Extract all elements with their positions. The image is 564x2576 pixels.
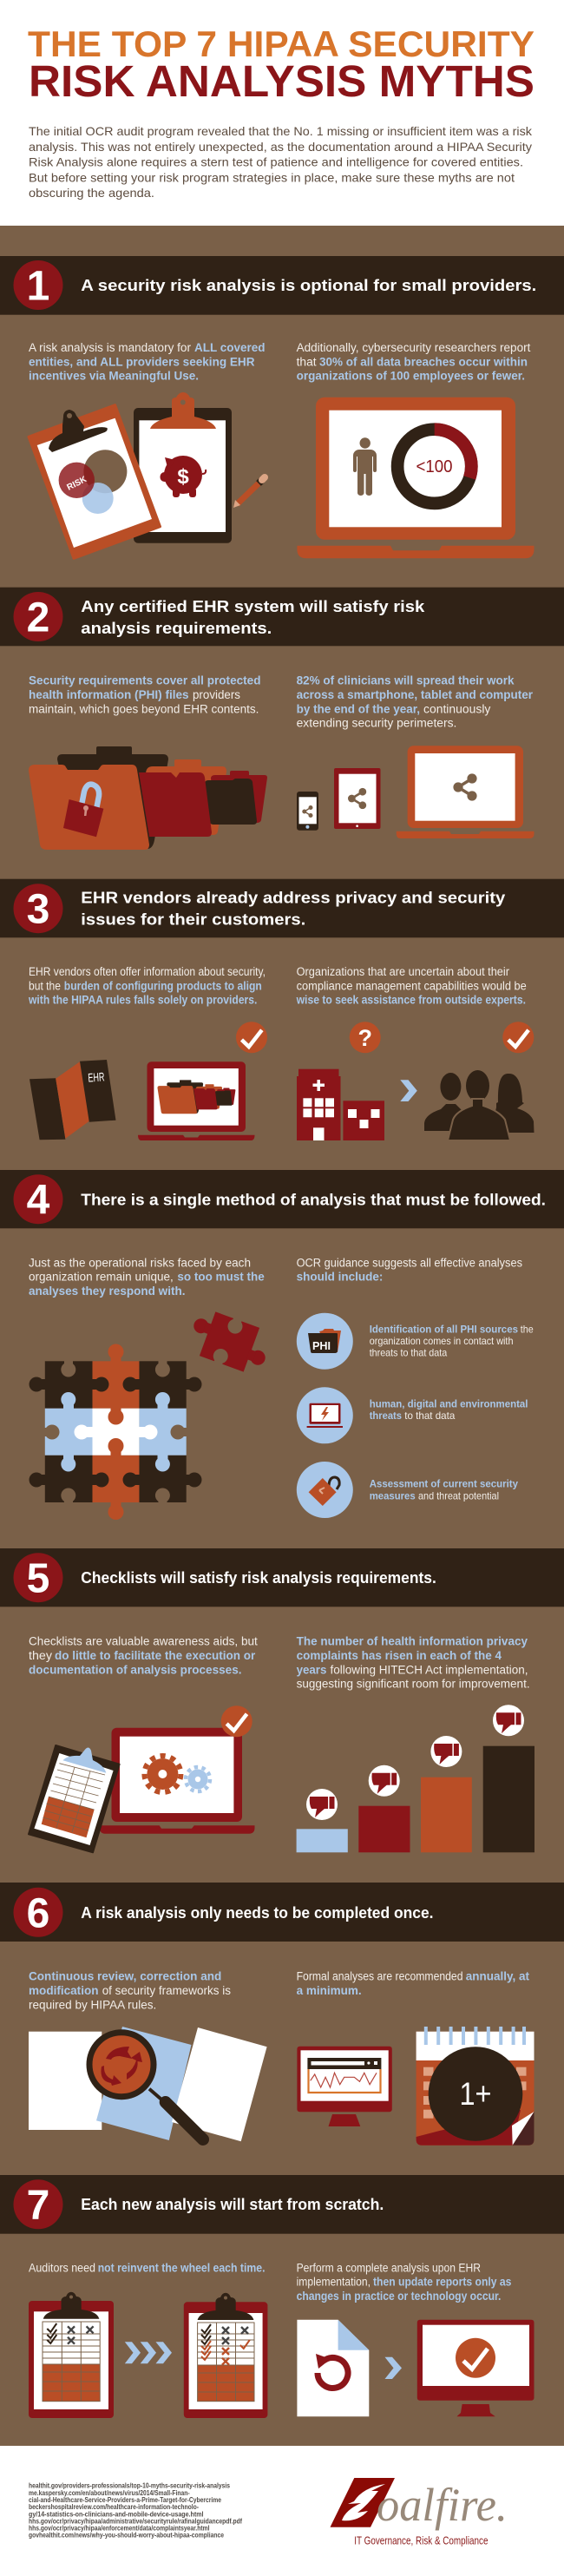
text: 82 percent of clinicians: extending security perimeters.: [297, 717, 456, 730]
intro paragraph: obscuring the agenda.: [29, 186, 154, 200]
icon: folders with padlock: [29, 746, 267, 850]
text: mandatory for all: [29, 341, 266, 382]
text: burden on providers: [28, 965, 266, 1007]
icon: documents with magnifying glass: [29, 2027, 267, 2141]
text: auditors: [29, 2261, 266, 2274]
text: annual analyses: [297, 1970, 529, 1997]
heading band 3: EHR vendors already address privacy and security: [81, 889, 506, 907]
icon: tilted checklist tablet: [29, 1745, 120, 1852]
heading band 5: Checklists will satisfy risk analysis requirements.: [81, 1568, 436, 1587]
text: 82 percent of clinicians: 82% of clinicians will spread their work: [297, 674, 515, 687]
text: unique analyses: [29, 1256, 265, 1298]
icon: EHR book: [30, 1060, 116, 1140]
panel: myth 4: [0, 1170, 564, 1520]
references list: [29, 2482, 242, 2540]
intro paragraph: Risk Analysis alone requires a stern test of patience and intelligence for covered entities.: [29, 155, 523, 169]
icon: blue gear: [186, 1767, 210, 1791]
text: privacy complaints: [297, 1635, 530, 1691]
text: 82 percent of clinicians: by the end of the year,: [297, 702, 420, 715]
heading band 2: [0, 588, 564, 646]
icon: thumbs down 4: [493, 1705, 524, 1736]
heading band 1: A security risk analysis is optional for small providers.: [81, 276, 536, 294]
heading band 1: [0, 256, 564, 315]
heading band 3: issues for their customers.: [81, 910, 305, 928]
heading band 4: [0, 1170, 564, 1228]
text: 30 percent of breaches: [297, 341, 531, 382]
heading band 4: 4: [27, 1178, 50, 1224]
item: threats: threats: [370, 1410, 402, 1422]
heading band 2: 2: [27, 595, 49, 641]
logo: Coalfire: [330, 2478, 508, 2547]
text: continuous review: required by HIPAA rules.: [29, 1998, 156, 2011]
notches: [43, 1360, 187, 1503]
title: THE TOP 7 HIPAA SECURITY: [28, 23, 534, 64]
panel: myth 1: [0, 256, 564, 558]
text: protected health information: providers: [193, 688, 240, 701]
heading band 7: 7: [27, 2183, 49, 2229]
text: privacy complaints: years: [297, 1663, 326, 1676]
icon: clipboard with piggy bank: $: [177, 465, 189, 489]
text: unique analyses: analyses they respond with.: [29, 1285, 186, 1298]
intro paragraph: The initial OCR audit program revealed that the No. 1 missing or insufficient item was a risk: [29, 124, 533, 138]
text: OCR guidance: OCR guidance suggests all effective analyses: [297, 1256, 522, 1269]
text: complete analysis: changes in practice or technology occur.: [297, 2290, 501, 2303]
text: checklists as aids: [29, 1635, 258, 1676]
item: PHI sources: organization comes in contact with: [370, 1335, 514, 1347]
text: continuous review: Continuous review, correction and: [29, 1970, 221, 1983]
text: mandatory for all: A risk analysis is mandatory for: [29, 341, 191, 354]
text: checklists as aids: Checklists are valuable awareness aids, but: [29, 1635, 258, 1648]
panel: myth 5: [0, 1548, 564, 1852]
heading band 6: [0, 1883, 564, 1942]
references list: beckershospitalreview.com/healthcare-information-technolo-: [29, 2503, 199, 2511]
text: 30 percent of breaches: organizations of 100 employees or fewer.: [297, 369, 525, 382]
intro paragraph: analysis. This was not entirely unexpected, as the documentation around a HIPAA Security: [29, 140, 532, 154]
icon: question badge: ?: [357, 1025, 372, 1051]
text: burden on providers: but the: [29, 979, 61, 992]
item: PHI sources: Identification of all PHI sources: [370, 1323, 518, 1335]
heading band 3: [0, 879, 564, 937]
text: protected health information: Security requirements cover all protected: [29, 674, 260, 687]
puzzle: assembled pieces: [30, 1344, 201, 1520]
text: complete analysis: Perform a complete analysis upon EHR: [297, 2261, 481, 2274]
icon: group of experts: [424, 1022, 534, 1140]
text: annual analyses: annually, at: [466, 1970, 529, 1983]
intro paragraph: [29, 124, 533, 200]
icon: monitor with waveform: [297, 2047, 392, 2126]
panel: myth 3: [0, 879, 564, 1140]
text: mandatory for all: incentives via Meaningful Use.: [29, 369, 199, 382]
bar chart: complaints by year: [297, 1705, 534, 1852]
item: threats: to that data: [404, 1410, 456, 1422]
text: continuous review: of security frameworks is: [102, 1984, 231, 1997]
icon: laptop with folders and check: [138, 1022, 267, 1140]
references list: healthit.gov/providers-professionals/top-10-myths-security-risk-analysis: [29, 2482, 230, 2490]
text: unique analyses: so too must the: [177, 1271, 265, 1284]
text: protected health information: health information (PHI) files: [29, 688, 189, 701]
text: privacy complaints: following HITECH Act implementation,: [330, 1663, 528, 1676]
heading band 2: analysis requirements.: [81, 619, 272, 637]
heading band 1: 1: [27, 264, 49, 309]
text: auditors: not reinvent the wheel each time.: [98, 2261, 266, 2274]
heading band 4: There is a single method of analysis that must be followed.: [81, 1190, 546, 1208]
text: 82 percent of clinicians: continuously: [423, 702, 491, 715]
text: seek outside experts: wise to seek assistance from outside experts.: [296, 994, 526, 1007]
icon: clipboard with piggy bank: [134, 392, 232, 543]
heading band 7: [0, 2175, 564, 2234]
text: 82 percent of clinicians: across a smartphone, tablet and computer: [297, 688, 534, 701]
icon: risk clipboard with venn diagram: RISK: [66, 475, 89, 493]
item: security assessment: and threat potential: [418, 1490, 499, 1502]
text: burden on providers: EHR vendors often offer information about security,: [29, 965, 266, 978]
text: annual analyses: Formal analyses are recommended: [297, 1970, 463, 1983]
icon: check badge: [221, 1705, 252, 1737]
item: PHI sources: PHI: [312, 1339, 331, 1352]
icon: laptop with donut chart: [297, 398, 534, 558]
icon: risk clipboard with venn diagram: [29, 405, 160, 558]
item: threats: human, digital and environmental: [370, 1397, 528, 1410]
arrow: triple chevrons: [125, 2342, 172, 2363]
text: privacy complaints: The number of health information privacy: [297, 1635, 528, 1648]
heading band 5: [0, 1548, 564, 1607]
references list: gy/14-statistics-on-clinicians-and-mobile-device-usage.html: [29, 2510, 203, 2518]
text: OCR guidance: [297, 1256, 522, 1284]
icon: padlock: [63, 785, 103, 837]
icon: calendar with 1+: 1+: [460, 2076, 491, 2112]
title: [28, 23, 534, 106]
text: 30 percent of breaches: 30% of all data breaches occur within: [319, 355, 528, 368]
icon: orange gear: [144, 1756, 180, 1792]
icon: hospital with question badge: [297, 1022, 384, 1140]
item: PHI sources: [297, 1313, 534, 1370]
icon: document with refresh arrow: [297, 2320, 369, 2416]
arrow: document to monitor: [385, 2357, 402, 2379]
icon: thumbs down 2: [369, 1765, 400, 1797]
icon: pencil: [233, 477, 265, 508]
icon: laptop with gears: [100, 1705, 255, 1834]
icon: EHR book: EHR: [88, 1069, 105, 1085]
item: threats: [297, 1387, 528, 1443]
heading band 3: 3: [27, 887, 49, 933]
panel: myth 2: [0, 588, 564, 850]
text: 30 percent of breaches: that: [297, 355, 317, 368]
donut chart: under 100 employees: <100: [416, 457, 453, 476]
heading band 6: A risk analysis only needs to be completed once.: [81, 1903, 434, 1922]
text: mandatory for all: ALL covered: [194, 341, 266, 354]
icon: thumbs down 3: [430, 1736, 462, 1767]
text: checklists as aids: do little to facilitate the execution or: [55, 1649, 256, 1662]
text: 30 percent of breaches: Additionally, cybersecurity researchers report: [297, 341, 531, 354]
puzzle: loose red piece: [184, 1305, 275, 1378]
text: seek outside experts: [296, 965, 527, 1007]
item: security assessment: Assessment of current security: [370, 1477, 518, 1489]
icon: calendar with 1+: [416, 2027, 534, 2146]
icon: monitor with check: [417, 2320, 534, 2416]
text: checklists as aids: they: [29, 1649, 52, 1662]
icon: thumbs down 1: [306, 1789, 338, 1820]
text: continuous review: modification: [29, 1984, 99, 1997]
icon: checklist clipboard after: [184, 2293, 267, 2418]
icon: check badge: [236, 1022, 267, 1053]
arrow: hospital to experts: [400, 1080, 417, 1101]
heading band 5: 5: [27, 1556, 49, 1602]
text: burden on providers: burden of configuring products to align: [64, 979, 262, 992]
icon: check badge: [502, 1022, 534, 1053]
references list: me.kaspersky.com/en/about/news/virus/2014/Small-Finan-: [29, 2489, 190, 2497]
item: PHI sources: the: [521, 1323, 534, 1335]
logo: Coalfire: oalfire.: [377, 2479, 508, 2531]
text: complete analysis: implementation,: [297, 2276, 371, 2289]
text: unique analyses: Just as the operational risks faced by each: [29, 1256, 251, 1269]
text: privacy complaints: suggesting significant room for improvement.: [297, 1678, 530, 1691]
text: protected health information: [29, 674, 260, 715]
icon: circular arrows: [101, 2047, 142, 2086]
panel: myth 6: [0, 1883, 564, 2146]
references list: hhs.gov/ocr/privacy/hipaa/enforcement/data/complaintsyear.html: [29, 2524, 210, 2532]
heading band 7: Each new analysis will start from scratch.: [81, 2195, 384, 2213]
intro paragraph: But before setting your risk program strategies in place, make sure these myths are not: [29, 170, 515, 184]
text: protected health information: maintain, which goes beyond EHR contents.: [29, 702, 259, 715]
panel: myth 7: [0, 2175, 564, 2418]
text: checklists as aids: documentation of analysis processes.: [29, 1663, 241, 1676]
text: auditors: Auditors need: [29, 2261, 95, 2274]
item: PHI sources: threats to that data: [370, 1346, 447, 1358]
references list: govhealthit.com/news/why-you-should-worry-about-hipaa-compliance: [29, 2532, 224, 2540]
text: seek outside experts: compliance management capabilities would be: [297, 979, 527, 992]
item: security assessment: [297, 1462, 518, 1518]
title: RISK ANALYSIS MYTHS: [29, 56, 534, 106]
references list: cial-and-Healthcare-Service-Providers-a-Prime-Target-for-Cybercrime: [29, 2496, 221, 2504]
text: complete analysis: then update reports only as: [373, 2276, 511, 2289]
text: burden on providers: with the HIPAA rules falls solely on providers.: [28, 994, 257, 1007]
item: security assessment: measures: [370, 1490, 416, 1502]
icon: tablet: [334, 768, 380, 829]
text: continuous review: [29, 1970, 231, 2011]
icon: checklist clipboard before: [29, 2292, 114, 2418]
text: unique analyses: organization remain unique,: [29, 1271, 174, 1284]
text: 82 percent of clinicians: [297, 674, 534, 730]
icon: person: [353, 437, 377, 496]
text: seek outside experts: Organizations that are uncertain about their: [297, 965, 509, 978]
donut chart: under 100 employees: [397, 430, 471, 503]
knobs: [30, 1377, 201, 1488]
text: OCR guidance: should include:: [297, 1271, 383, 1284]
references list: hhs.gov/ocr/privacy/hipaa/administrative/securityrule/rafinalguidancepdf.pdf: [29, 2517, 242, 2525]
logo: Coalfire: IT Governance, Risk & Compliance: [354, 2535, 489, 2547]
text: annual analyses: a minimum.: [297, 1984, 362, 1997]
heading band 2: Any certified EHR system will satisfy risk: [81, 597, 425, 615]
text: privacy complaints: complaints has risen in each of the 4: [297, 1649, 502, 1662]
text: mandatory for all: entities, and ALL providers seeking EHR: [29, 355, 255, 368]
text: complete analysis: [297, 2261, 511, 2303]
icon: smartphone: [297, 792, 318, 831]
heading band 6: 6: [27, 1890, 49, 1936]
icon: laptop with share: [397, 746, 534, 838]
